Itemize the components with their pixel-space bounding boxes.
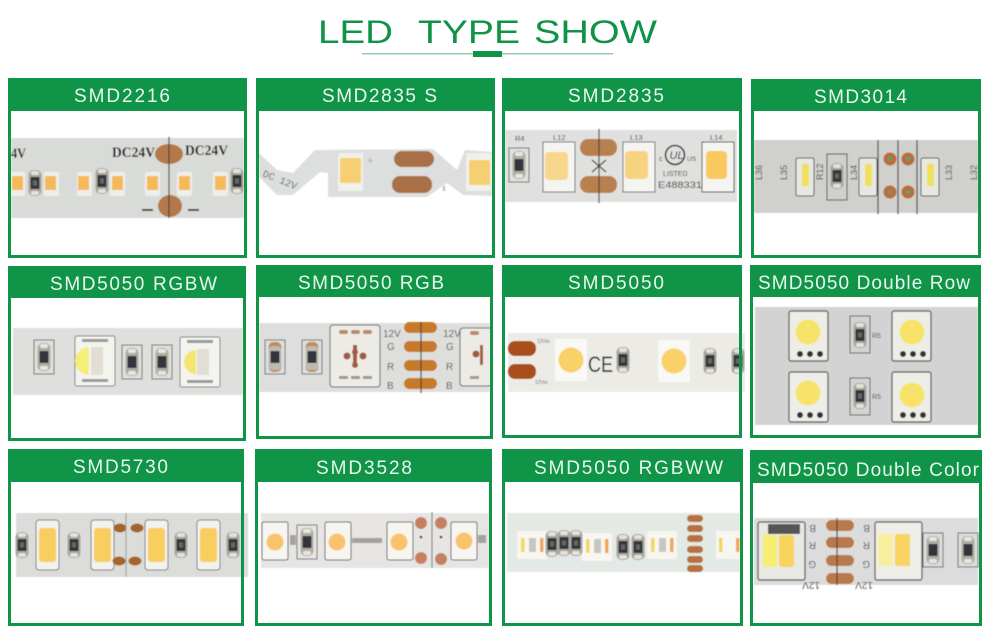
LED strip photo: SMD5050 RGB: 12V [443,329,461,340]
LED strip photo: SMD2835: E488331 [658,180,702,190]
LED strip photo: SMD3014: L36 [754,165,764,180]
heading: SMD5050 RGBWW: SMD5050 RGBWW [534,458,723,479]
panel: SMD5050 RGBW [8,266,246,441]
title: LED [318,14,393,50]
LED strip photo: SMD5050 RGBWW [507,513,740,572]
LED strip photo: SMD5050 RGB: G [446,342,454,353]
LED strip photo: SMD5050 Double Color: B [863,522,870,533]
panel: SMD5050 Double Row [750,265,981,438]
LED strip photo: SMD5050 Double Color: 12V [855,579,873,590]
LED strip photo: SMD2835 S: + [367,155,373,167]
panel: SMD5050 [502,265,745,438]
panel: SMD5050 Double Color [750,450,982,626]
heading: SMD5730: SMD5730 [73,457,168,478]
LED strip photo: SMD3014 [754,140,979,214]
LED strip photo: SMD2835: c [659,156,663,163]
LED strip photo: SMD2835 [505,129,737,203]
heading: SMD2835 S: SMD2835 S [322,86,437,107]
title: TYPE [418,14,520,50]
LED strip photo: SMD2835: US [687,156,697,163]
LED strip photo: SMD5050 RGB: R [387,362,394,373]
heading: SMD2216: SMD2216 [74,86,170,107]
LED strip photo: SMD5050 Double Color: R [863,539,870,550]
panel: SMD2835 [502,78,742,258]
LED strip photo: SMD5050: 12Vin [537,339,550,345]
LED strip photo: SMD2835: L12 [553,133,566,142]
LED strip photo: SMD5050 Double Row: R5 [872,333,881,340]
LED strip photo: SMD5050 Double Color [754,518,978,590]
panel: SMD2835 S [256,78,495,258]
panel: SMD5050 RGBWW [502,449,743,626]
title underline [362,51,613,57]
LED strip photo: SMD2835: LISTED [663,171,688,178]
heading: SMD5050 Double Color: SMD5050 Double Color [757,460,980,481]
panel: SMD3014 [751,79,981,258]
LED strip photo: SMD2216: DC24V [112,145,155,161]
LED strip photo: SMD3014: L35 [779,165,789,180]
LED strip photo: SMD2216 [10,137,244,218]
title: SHOW [534,14,658,50]
LED strip photo: SMD5050 [508,333,745,392]
LED strip photo: SMD5050 RGB: R [446,362,453,373]
LED strip photo: SMD5050 Double Row: R5 [872,394,881,401]
LED strip photo: SMD2216: 4V [11,146,26,162]
heading: SMD5050 Double Row: SMD5050 Double Row [758,273,970,294]
heading: SMD5050 RGBW: SMD5050 RGBW [50,274,217,295]
LED strip photo: SMD5730 [16,513,248,577]
LED strip photo: SMD3528 [261,512,490,568]
title [318,14,658,50]
panel: SMD2216 [8,78,247,258]
LED strip photo: SMD2835: L14 [710,133,723,142]
heading: SMD3528: SMD3528 [316,458,412,479]
LED strip photo: SMD5050 Double Color: G [862,558,870,569]
LED strip photo: SMD5050 Double Color: R [809,539,816,550]
LED strip photo: SMD2835 S [259,149,492,197]
LED strip photo: SMD5050 RGBW [13,328,243,395]
LED strip photo: SMD5050 RGB: G [387,342,395,353]
LED strip photo: SMD5050 RGB: 12V [383,329,401,340]
LED strip photo: SMD5050 Double Color: B [809,522,816,533]
LED strip photo: SMD2216: DC24V [185,143,228,159]
LED strip photo: SMD5050: CE [588,352,613,377]
LED strip photo: SMD5050 Double Color: G [808,558,816,569]
panel: SMD3528 [255,449,492,626]
LED strip photo: SMD3014: L33 [944,165,954,180]
LED strip photo: SMD5050 RGB: B [446,381,453,392]
LED strip photo: SMD3014: R12 [815,163,825,180]
LED strip photo: SMD2835: R4 [515,134,525,143]
heading: SMD5050: SMD5050 [568,273,664,294]
heading: SMD5050 RGB: SMD5050 RGB [298,273,444,294]
LED strip photo: SMD5050 Double Color: 12V [802,579,820,590]
LED strip photo: SMD5050 RGB [259,322,492,393]
heading: SMD2835: SMD2835 [568,86,664,107]
LED strip photo: SMD5050 RGB: B [387,381,394,392]
LED strip photo: SMD3014: L32 [969,165,979,180]
LED strip photo: SMD2835: L13 [630,133,643,142]
LED strip photo: SMD5050 Double Row [755,307,978,425]
LED strip photo: SMD2835: UL [670,150,684,162]
LED strip photo: SMD5050: 12Vin [535,380,548,386]
panel: SMD5050 RGB [256,265,493,439]
LED strip photo: SMD2835 S: DC 12V [261,170,298,193]
panel: SMD5730 [8,449,248,626]
heading: SMD3014: SMD3014 [814,87,907,108]
LED strip photo: SMD3014: L34 [849,165,859,180]
